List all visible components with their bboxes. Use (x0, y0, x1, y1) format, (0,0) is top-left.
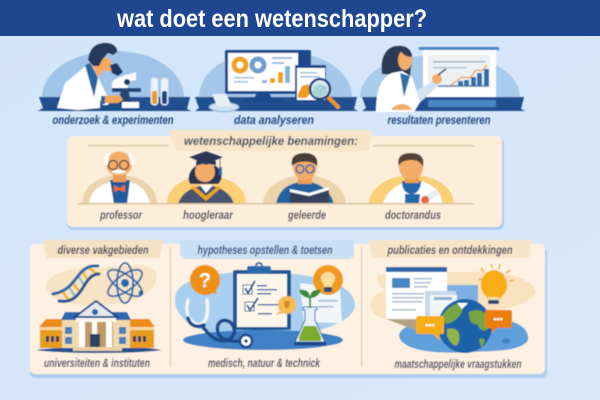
figure: hoogleraar (167, 151, 246, 222)
figure: geleerde (263, 153, 346, 222)
icon: small bulb badge (276, 296, 296, 315)
icon: stethoscope (187, 300, 252, 347)
heading tab (368, 240, 532, 258)
column: hypotheses opstellen & toetsen (175, 240, 355, 370)
icon: monitor with charts (225, 50, 311, 102)
icon: clipboard (233, 263, 291, 330)
label: geleerde (287, 210, 326, 222)
icon: speech bubble yellow (416, 316, 444, 341)
icon: question bubble (190, 265, 220, 295)
figure: doctorandus (369, 153, 454, 222)
label: maatschappelijke vraagstukken (394, 359, 522, 371)
icon: scientist at microscope (57, 43, 141, 110)
label: hoogleraar (183, 210, 233, 222)
scene: data analyseren (195, 50, 358, 127)
icon: lightbulb (479, 264, 514, 304)
scene: onderzoek & experimenten (38, 43, 191, 127)
panel: onderste rij (30, 240, 547, 378)
title banner: wat doet een wetenschapper? (116, 5, 427, 33)
icon: presentation board (419, 47, 499, 107)
heading tab: hypotheses opstellen & toetsen (198, 245, 332, 257)
heading tab: wetenschappelijke benamingen: (184, 134, 358, 148)
scene: resultaten presenteren (360, 46, 525, 127)
icon: presenter (376, 46, 446, 112)
blob and table (175, 272, 355, 338)
icon: university building (36, 301, 161, 353)
icon: speech bubble orange: ••• (493, 314, 503, 324)
label: resultaten presenteren (388, 115, 490, 127)
heading tab: diverse vakgebieden (58, 245, 148, 257)
icon: magnifier (310, 79, 338, 107)
icon: document behind flask (300, 283, 342, 323)
label: medisch, natuur & technick (208, 358, 320, 370)
icon: atom (104, 263, 146, 303)
icon: speech bubble yellow: ••• (425, 320, 435, 330)
panel: wetenschappelijke benamingen (67, 130, 504, 230)
icon: DNA (53, 266, 99, 301)
heading tab: publicaties en ontdekkingen (387, 245, 512, 257)
figure: professor (82, 152, 157, 222)
heading tab (180, 240, 354, 259)
title banner (0, 0, 600, 36)
label: doctorandus (385, 210, 441, 222)
column: publicaties en ontdekkingen (368, 240, 535, 371)
icon: stacked pages (425, 285, 478, 326)
icon: document (386, 267, 447, 330)
column: diverse vakgebieden (36, 240, 163, 370)
icon: chart window (295, 65, 326, 102)
label: professor (99, 210, 142, 222)
label: data analyseren (234, 115, 314, 127)
icon: paper on plate (209, 94, 239, 112)
icon: question bubble: ? (199, 270, 211, 292)
blobs (370, 272, 535, 320)
label: onderzoek & experimenten (52, 115, 174, 127)
icon: globe (438, 299, 492, 353)
icon: lightbulb badge (313, 265, 343, 295)
heading tab (169, 130, 372, 151)
icon: test tubes (151, 78, 168, 105)
icon: speech bubble orange (485, 310, 512, 333)
icon: flask with plant (294, 290, 326, 346)
label: universiteiten & instituten (44, 358, 150, 370)
